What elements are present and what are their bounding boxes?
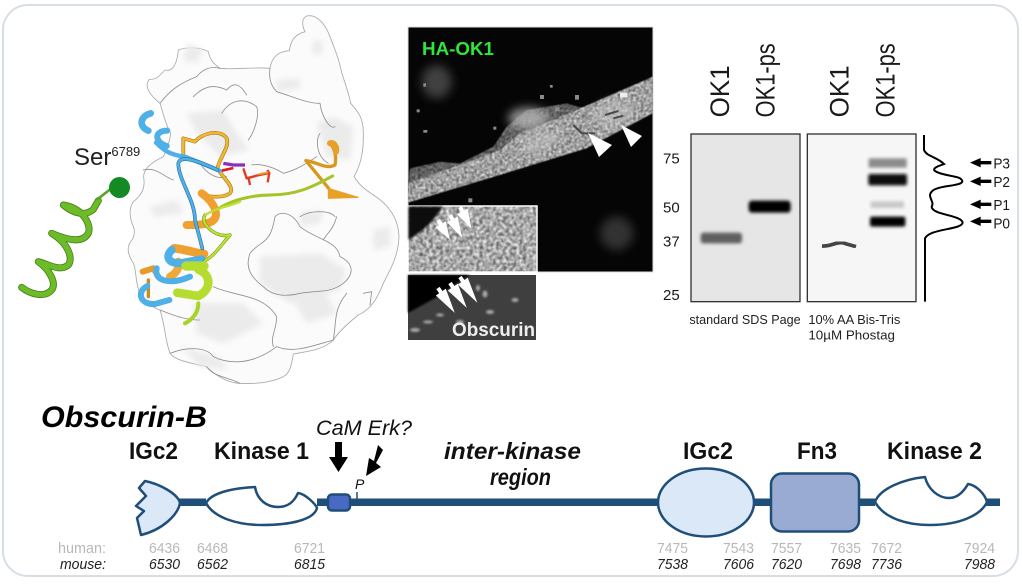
human residue numbers: 6721 xyxy=(294,541,325,557)
mouse residue numbers: 7606 xyxy=(723,557,755,573)
gold loop xyxy=(183,133,231,197)
human residue numbers: human: xyxy=(58,541,106,557)
human residue numbers: 7672 xyxy=(871,541,902,557)
mouse residue numbers: mouse: xyxy=(60,557,106,573)
human residue numbers: 7475 xyxy=(657,541,688,557)
mouse residue numbers: 6562 xyxy=(197,557,228,573)
inset: HA-OK1 zoom xyxy=(408,204,537,272)
mouse residue numbers: 7620 xyxy=(771,557,802,573)
arrow: CaM xyxy=(329,442,348,472)
lane labels: OK1-ps xyxy=(751,43,781,117)
ligand xyxy=(222,163,269,185)
panel: protein structure xyxy=(22,16,399,384)
inset arrows xyxy=(433,274,482,316)
panel: HA-OK1 micrograph xyxy=(407,27,653,272)
domain names: Kinase 1 xyxy=(214,438,309,465)
blue helix xyxy=(142,113,151,131)
peak labels xyxy=(970,156,1010,232)
inset: Obscurin xyxy=(408,274,536,341)
fibre and cell signal xyxy=(407,65,653,250)
inter-kinase region label: region xyxy=(490,464,551,490)
domain: Fn3 xyxy=(771,474,859,532)
inset arrows xyxy=(433,204,477,243)
gel: standard SDS page xyxy=(691,134,800,302)
densitometry trace xyxy=(924,135,963,302)
mouse residue numbers: 7538 xyxy=(657,557,688,573)
human residue numbers: 6468 xyxy=(197,541,228,557)
human residue numbers: 6436 xyxy=(149,541,180,557)
CaM Erk label: CaM Erk? xyxy=(316,417,412,440)
domain: CaM binding site xyxy=(328,494,350,510)
panel: Obscurin-B domain diagram xyxy=(41,401,1000,573)
orange helix xyxy=(187,193,216,225)
arrow: Erk xyxy=(366,445,383,476)
peak labels: P2 xyxy=(993,175,1010,191)
domain: IGc2 N-terminal xyxy=(136,481,180,535)
panel: gels xyxy=(663,43,1010,342)
domain: Kinase 2 xyxy=(875,477,987,525)
molecular weight markers: 75 xyxy=(663,150,680,167)
phospho-site: P xyxy=(355,476,365,492)
molecular weight markers: 50 xyxy=(663,199,680,216)
human residue numbers: 7557 xyxy=(771,541,802,557)
lane labels xyxy=(705,43,900,117)
inter-kinase region label: inter-kinase xyxy=(444,438,581,464)
molecular weight markers xyxy=(663,150,680,304)
lane labels: OK1-ps xyxy=(870,43,900,117)
mouse residue numbers: 7698 xyxy=(830,557,861,573)
gel captions: 10µM Phostag xyxy=(808,328,895,342)
backbone xyxy=(178,498,1000,506)
mouse residue numbers: 7988 xyxy=(964,557,995,573)
mouse residue numbers: 6815 xyxy=(294,557,326,573)
peak labels: P3 xyxy=(993,156,1010,172)
phospho-site xyxy=(355,476,365,499)
long lime strand xyxy=(217,176,333,210)
domain names xyxy=(129,438,982,465)
lime helix xyxy=(204,215,230,261)
peak labels: P0 xyxy=(993,216,1010,232)
kinase surface xyxy=(128,16,399,384)
lane labels: OK1 xyxy=(705,65,735,117)
domain: Kinase 1 xyxy=(206,487,317,525)
arrowheads xyxy=(588,125,642,157)
gel: phostag xyxy=(807,134,916,302)
gel captions: standard SDS Page xyxy=(689,313,801,327)
human residue numbers xyxy=(58,541,995,557)
peak labels: P1 xyxy=(993,198,1010,214)
inter-kinase region label xyxy=(444,438,581,490)
gel captions: 10% AA Bis-Tris xyxy=(808,313,900,327)
title: Obscurin-B xyxy=(41,401,207,434)
gel captions xyxy=(689,313,900,342)
human residue numbers: 7924 xyxy=(964,541,995,557)
green helix xyxy=(22,190,109,295)
domain names: Fn3 xyxy=(797,438,837,465)
Ser6789 label: Ser xyxy=(74,144,111,171)
surface contour lines xyxy=(143,68,372,383)
ribbons near active site xyxy=(141,113,240,323)
domain names: IGc2 xyxy=(129,438,178,465)
right orange segment xyxy=(306,143,358,198)
HA-OK1 label: HA-OK1 xyxy=(422,38,494,59)
human residue numbers: 7635 xyxy=(830,541,861,557)
human residue numbers: 7543 xyxy=(723,541,754,557)
Ser6789 residue sphere xyxy=(109,177,130,198)
lane labels: OK1 xyxy=(825,65,855,117)
surface shading xyxy=(150,40,390,370)
mouse residue numbers: 6530 xyxy=(149,557,180,573)
domain names: IGc2 xyxy=(683,438,733,465)
Obscurin label: Obscurin xyxy=(452,320,535,341)
domain names: Kinase 2 xyxy=(887,438,982,465)
domain: IGc2 xyxy=(658,468,754,536)
Ser6789 label: 6789 xyxy=(111,144,140,159)
mouse residue numbers xyxy=(60,557,995,573)
molecular weight markers: 25 xyxy=(663,287,680,304)
molecular weight markers: 37 xyxy=(663,234,680,251)
mouse residue numbers: 7736 xyxy=(871,557,903,573)
